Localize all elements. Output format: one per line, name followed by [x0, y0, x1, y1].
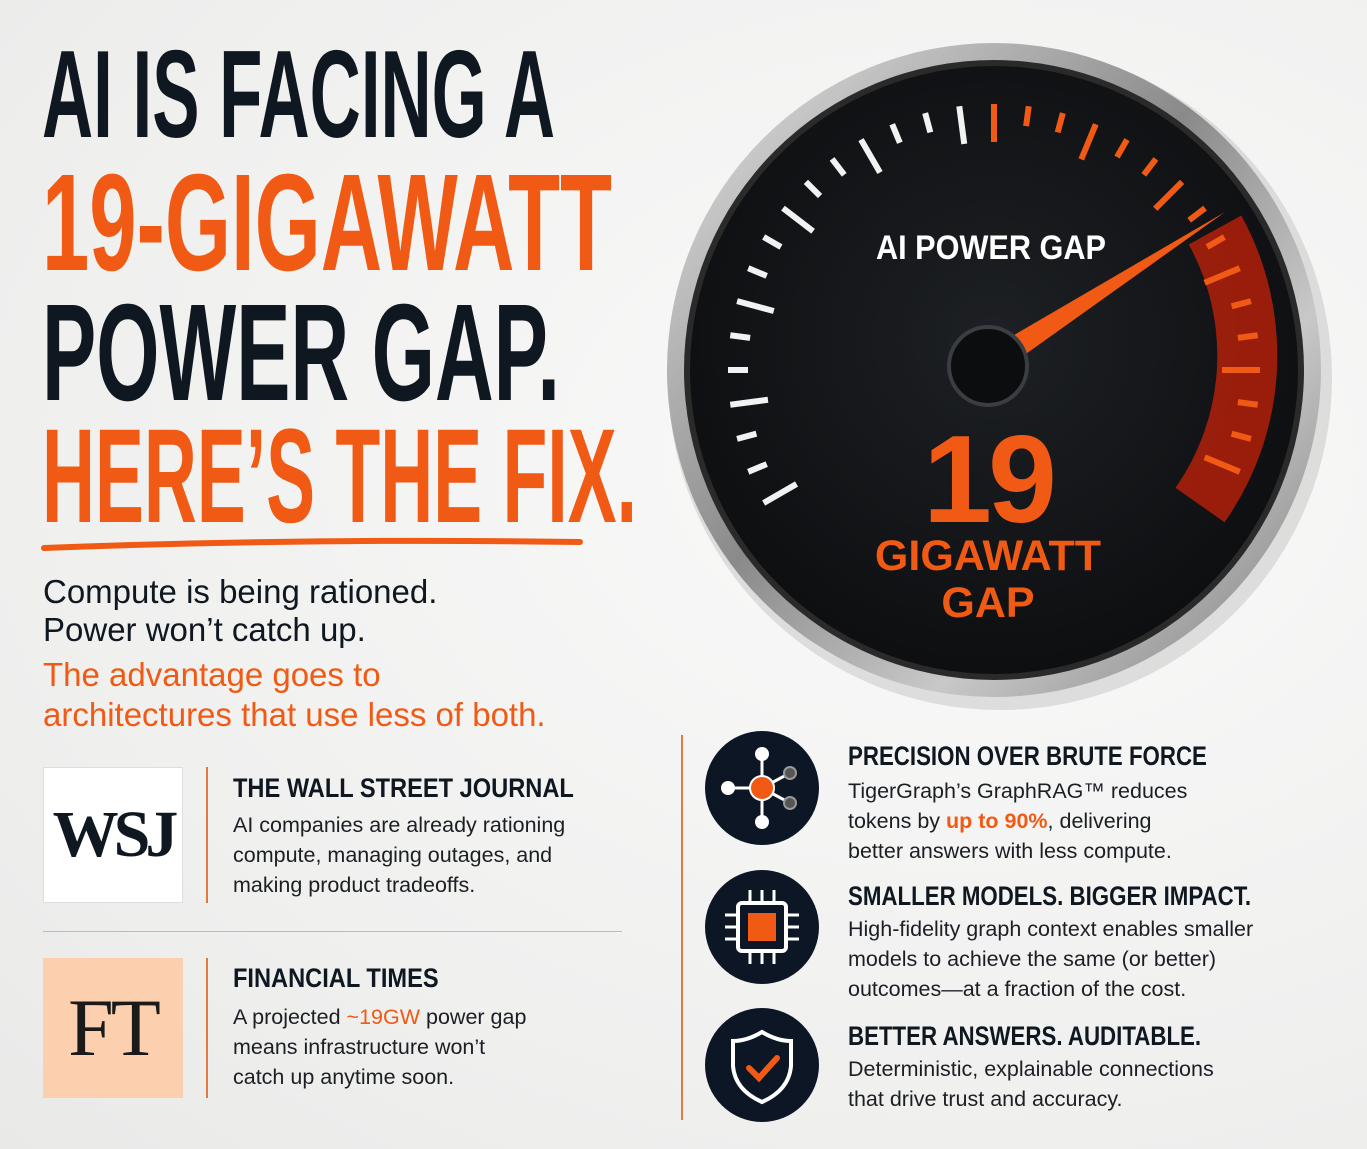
- subtitle: Power won’t catch up.: [43, 611, 366, 648]
- gauge: [667, 43, 1332, 710]
- subtitle: The advantage goes to: [43, 656, 381, 693]
- benefit 1: [848, 741, 1207, 863]
- subtitle: Compute is being rationed.: [43, 573, 437, 610]
- benefit 3: Deterministic, explainable connections: [848, 1057, 1214, 1081]
- needle: [985, 212, 1225, 376]
- WSJ text: AI companies are already rationing: [233, 813, 565, 837]
- subtitle: architectures that use less of both.: [43, 696, 546, 733]
- benefit 3: that drive trust and accuracy.: [848, 1087, 1122, 1111]
- WSJ text: making product tradeoffs.: [233, 873, 475, 897]
- benefit 1: tokens by up to 90%, delivering: [848, 809, 1152, 833]
- benefit 3: BETTER ANSWERS. AUDITABLE.: [848, 1021, 1201, 1051]
- benefit 2: High-fidelity graph context enables smaller: [848, 917, 1253, 941]
- icon: shield: [705, 1008, 819, 1122]
- FT logo: [43, 958, 183, 1098]
- headline: [41, 26, 637, 551]
- benefit 2: outcomes—at a fraction of the cost.: [848, 977, 1186, 1001]
- benefit 2: models to achieve the same (or better): [848, 947, 1216, 971]
- FT text: FINANCIAL TIMES: [233, 963, 439, 993]
- FT text: catch up anytime soon.: [233, 1065, 454, 1089]
- gauge: GAP: [941, 579, 1035, 627]
- WSJ text: compute, managing outages, and: [233, 843, 552, 867]
- WSJ text: THE WALL STREET JOURNAL: [233, 773, 574, 803]
- red zone: [1200, 230, 1247, 505]
- benefit 1: PRECISION OVER BRUTE FORCE: [848, 741, 1207, 771]
- FT text: [233, 963, 526, 1089]
- benefit 1: TigerGraph’s GraphRAG™ reduces: [848, 779, 1187, 803]
- WSJ text: [233, 773, 574, 897]
- icon: graph: [705, 731, 819, 845]
- gauge: 19: [923, 411, 1053, 549]
- FT logo: FT: [68, 982, 158, 1073]
- WSJ logo: WSJ: [53, 798, 173, 871]
- subtitle: [43, 573, 546, 733]
- icon: chip: [705, 870, 819, 984]
- benefit 3: [848, 1021, 1214, 1111]
- FT text: means infrastructure won’t: [233, 1035, 485, 1059]
- WSJ logo: [43, 767, 183, 903]
- benefit 2: SMALLER MODELS. BIGGER IMPACT.: [848, 881, 1251, 911]
- FT text: A projected ~19GW power gap: [233, 1005, 526, 1029]
- benefit 1: better answers with less compute.: [848, 839, 1172, 863]
- gauge: AI POWER GAP: [876, 229, 1106, 267]
- gauge: GIGAWATT: [875, 532, 1101, 580]
- benefit 2: [848, 881, 1253, 1001]
